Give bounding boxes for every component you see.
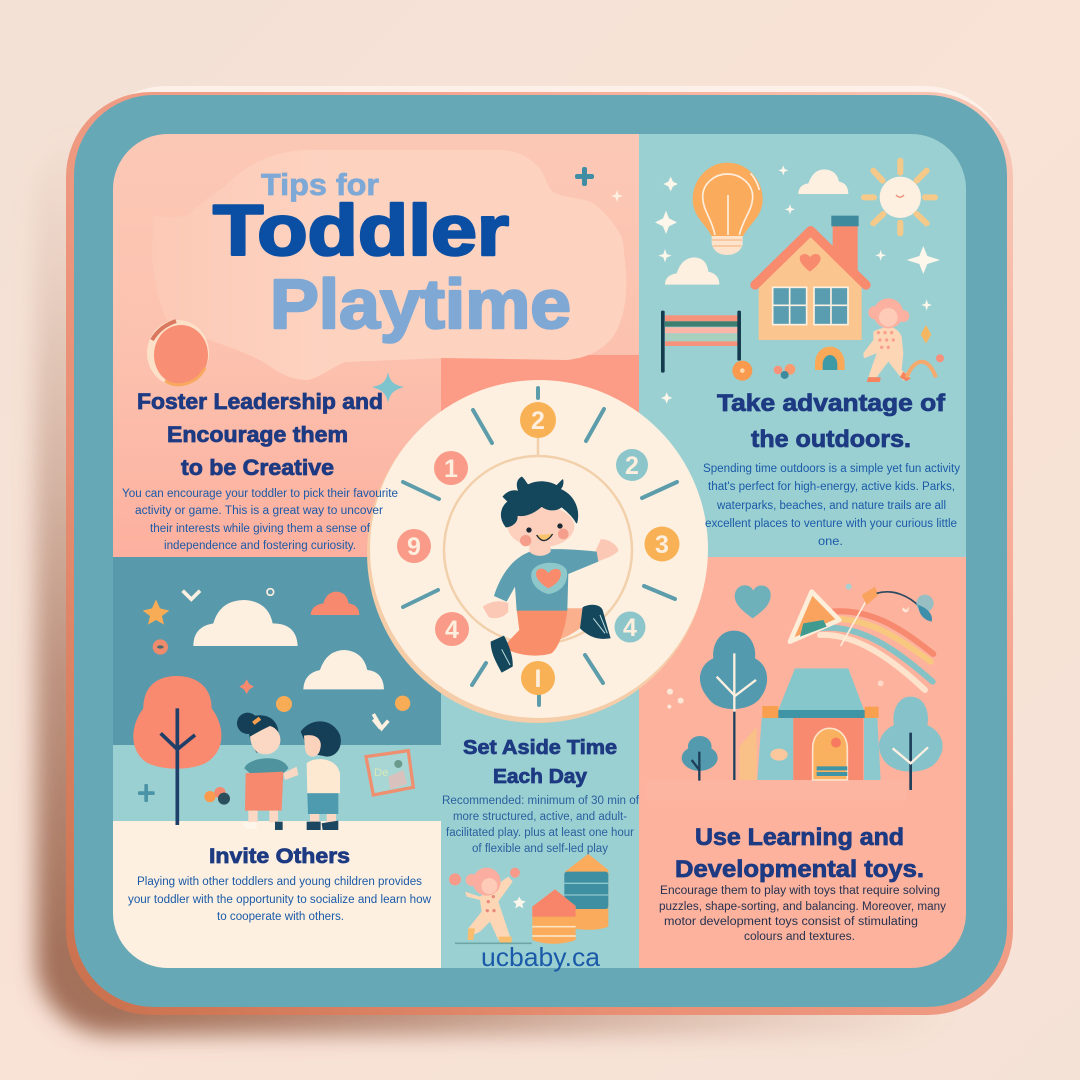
ground line bbox=[455, 941, 532, 946]
icon: tree bbox=[133, 676, 221, 825]
heading: foster leadership bbox=[137, 389, 383, 480]
text: outdoors body: waterparks, beaches, and nature trails are all bbox=[716, 500, 946, 512]
icon: picture frame: De bbox=[374, 767, 388, 779]
text: outdoors body: Spending time outdoors is a simple yet fun activity bbox=[703, 463, 960, 475]
cheeks bbox=[520, 535, 531, 546]
text: learning toys body: Encourage them to play with toys that require solving bbox=[660, 885, 940, 897]
icon: house bbox=[755, 216, 866, 340]
text: set aside time body: more structured, active, and adult- bbox=[453, 811, 627, 823]
number badges: 2 bbox=[625, 452, 639, 480]
text: learning toys body: motor development toys consist of stimulating bbox=[664, 916, 918, 928]
icon: picture frame bbox=[366, 751, 413, 795]
illustration: toddler and stacking toys bbox=[449, 854, 608, 944]
number badges: 3 bbox=[655, 531, 669, 559]
icon: sparkle near plus bbox=[611, 190, 623, 202]
heading: set aside time: Set Aside Time bbox=[463, 737, 617, 759]
icon: toy rainbow slide bbox=[907, 325, 944, 377]
number badges: 1 bbox=[444, 455, 458, 483]
text: invite others body: to cooperate with others. bbox=[217, 911, 344, 923]
icon: small ring bbox=[267, 589, 274, 595]
number badges: 9 bbox=[407, 533, 421, 561]
text: foster leadership body: their interests while giving them a sense of bbox=[150, 523, 371, 535]
icon: toy arch bbox=[815, 347, 845, 370]
heading: foster leadership: Encourage them bbox=[167, 422, 348, 447]
icon: teal sparkle bbox=[372, 372, 404, 403]
icon: toy flowers bbox=[774, 364, 795, 379]
heading: set aside time bbox=[463, 737, 617, 788]
icon: ball bbox=[147, 320, 209, 386]
text: learning toys body bbox=[659, 885, 946, 943]
title line: Toddler: Toddler bbox=[213, 192, 509, 271]
text: set aside time body: Recommended: minimum of 30 min of bbox=[442, 795, 640, 807]
text: foster leadership body: independence and fostering curiosity. bbox=[164, 540, 356, 552]
number badges: 4 bbox=[623, 614, 637, 642]
number badges: I bbox=[535, 665, 541, 693]
text: outdoors body bbox=[703, 463, 960, 548]
icon: check chevrons bbox=[183, 591, 388, 728]
icon: small tree bbox=[682, 736, 718, 781]
icon: boy bbox=[301, 721, 341, 830]
panel: top left salmon bbox=[113, 134, 639, 557]
hair bbox=[502, 477, 577, 527]
text: set aside time body: facilitated play. plus at least one hour bbox=[446, 827, 634, 839]
icon: toddler bbox=[449, 868, 520, 943]
icon: sun bbox=[864, 161, 935, 233]
card frame bbox=[66, 86, 1013, 1015]
icon: ground band bbox=[647, 781, 907, 801]
trousers front leg bbox=[503, 609, 567, 656]
icon: plus decoration bbox=[575, 167, 594, 186]
text: foster leadership body: You can encourage your toddler to pick their favourite bbox=[122, 488, 398, 500]
panel: outdoors bbox=[639, 134, 966, 557]
neck bbox=[529, 545, 551, 556]
heading: learning toys: Use Learning and bbox=[695, 824, 904, 851]
title cloud blob bbox=[152, 150, 626, 380]
icon: heart bbox=[735, 585, 771, 618]
icon: toddler figure bbox=[863, 298, 911, 382]
icon: jumping child bbox=[483, 477, 619, 673]
icon: plus bbox=[138, 784, 155, 802]
left hand bbox=[483, 601, 508, 618]
number badges: 2 bbox=[531, 407, 545, 435]
icon: playhouse bbox=[739, 668, 881, 780]
eyes and smile bbox=[526, 527, 532, 533]
heading: take advantage bbox=[717, 390, 946, 453]
text: outdoors body: one. bbox=[818, 536, 843, 548]
shoe laces bbox=[502, 615, 607, 665]
heading: foster leadership: to be Creative bbox=[181, 455, 334, 480]
icon: clouds bbox=[193, 600, 384, 689]
text: set aside time body bbox=[442, 795, 640, 855]
panel: invite others text bbox=[113, 821, 441, 968]
chart: clock wheel bbox=[367, 380, 708, 723]
text: website: ucbaby.ca bbox=[481, 942, 601, 972]
heading: set aside time: Each Day bbox=[493, 766, 588, 788]
icon: tall stack bbox=[564, 854, 608, 930]
wheel disc bbox=[367, 380, 708, 723]
panel: centre top salmon bbox=[441, 355, 639, 412]
icon: salmon cloud bbox=[311, 592, 359, 615]
icon: orange ball bbox=[732, 361, 752, 381]
panel: learning toys bbox=[639, 557, 966, 968]
icon: big teal tree bbox=[700, 631, 767, 780]
shoes bbox=[491, 636, 513, 673]
heading: learning toys bbox=[675, 824, 924, 883]
icon: star bbox=[513, 897, 526, 908]
panel: invite others sky bbox=[113, 557, 441, 745]
title line: Playtime: Playtime bbox=[270, 265, 571, 343]
icon: short stack bbox=[532, 889, 576, 944]
heading: learning toys: Developmental toys. bbox=[675, 856, 924, 883]
icon: girl bbox=[237, 713, 298, 830]
sweater bbox=[494, 549, 598, 611]
text: outdoors body: excellent places to venture with your curious little bbox=[705, 518, 957, 530]
right hand bbox=[595, 539, 619, 562]
text: set aside time body: of flexible and self-led play bbox=[472, 843, 608, 855]
text: learning toys body: puzzles, shape-sorting, and balancing. Moreover, many bbox=[659, 901, 946, 913]
heart badge bbox=[531, 563, 567, 594]
text: foster leadership body bbox=[122, 488, 398, 552]
icon: rainbow bbox=[820, 611, 933, 690]
icon: toy bbox=[204, 787, 230, 805]
illustration: invite others scene bbox=[133, 589, 413, 830]
panel: set aside time bbox=[441, 660, 639, 968]
number badges bbox=[397, 402, 680, 695]
panel: invite others ground bbox=[113, 745, 441, 821]
text: invite others body: your toddler with the opportunity to socialize and learn how bbox=[128, 894, 432, 906]
trousers back leg bbox=[555, 608, 583, 641]
heading: invite others: Invite Others bbox=[209, 845, 350, 868]
card shadow bbox=[36, 125, 966, 1035]
icon: dots bbox=[667, 584, 909, 709]
clock ticks bbox=[403, 388, 677, 705]
number badges: 4 bbox=[445, 616, 459, 644]
illustration: learning toys scene bbox=[647, 584, 943, 801]
text: foster leadership body: activity or game. This is a great way to uncover bbox=[135, 505, 383, 517]
icon: orange dots bbox=[153, 639, 410, 712]
text: invite others body: Playing with other toddlers and young children provides bbox=[137, 876, 422, 888]
icon: sparkles bbox=[655, 165, 940, 404]
panels bbox=[113, 134, 966, 968]
icon: triangle kite bbox=[790, 592, 839, 642]
icon: swing fence bbox=[661, 311, 741, 373]
title line: Tips for: Tips for bbox=[261, 167, 379, 202]
text: invite others body bbox=[128, 876, 432, 923]
icon: light tree bbox=[879, 697, 943, 790]
heading: take advantage: the outdoors. bbox=[751, 426, 911, 453]
icon: wand and leaf bbox=[841, 587, 934, 646]
title bbox=[213, 167, 571, 343]
heading: foster leadership: Foster Leadership and bbox=[137, 389, 383, 414]
icon: light bulb bbox=[693, 163, 763, 255]
illustration: outdoors scene bbox=[655, 161, 944, 404]
text: outdoors body: that's perfect for high-energy, active kids. Parks, bbox=[708, 481, 955, 493]
icon: clouds bbox=[665, 169, 848, 285]
icon: star bbox=[143, 599, 169, 625]
heading: take advantage: Take advantage of bbox=[717, 390, 946, 417]
text: learning toys body: colours and textures. bbox=[744, 931, 855, 943]
head bbox=[508, 506, 574, 547]
